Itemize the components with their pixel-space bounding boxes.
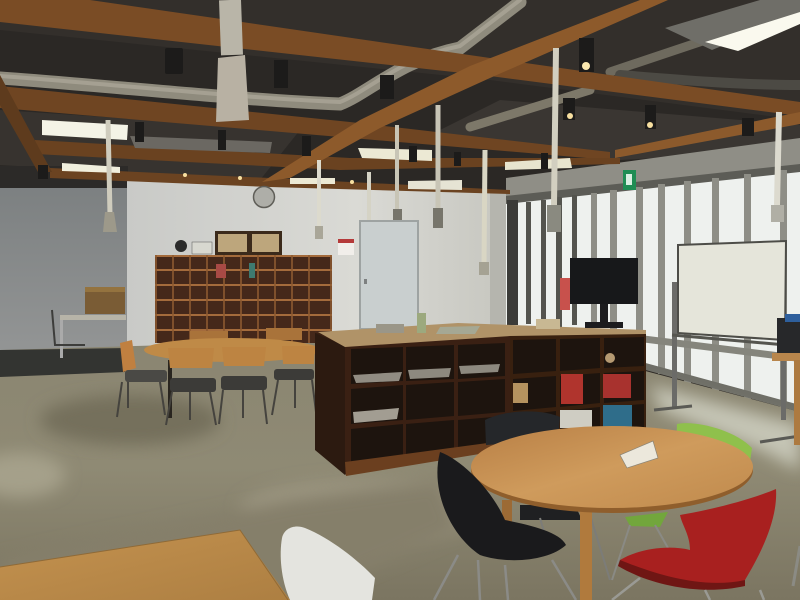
black chair behind table	[485, 411, 610, 580]
white chair foreground	[281, 526, 375, 600]
hanging exhaust hoses	[103, 0, 784, 275]
ceiling light panels	[42, 0, 800, 190]
left side desk and boxes	[52, 287, 126, 358]
green chair	[612, 423, 752, 580]
whiteboard on stand	[654, 241, 800, 442]
meeting table with chairs	[117, 328, 320, 425]
central bookshelf island	[315, 313, 646, 476]
foreground wooden table	[0, 530, 290, 600]
black chair foreground	[434, 452, 576, 600]
red chair	[612, 489, 776, 600]
window wall	[506, 138, 800, 412]
round table	[471, 426, 753, 600]
wooden ceiling beams	[0, 0, 800, 194]
ceiling ducts	[0, 0, 800, 127]
back pigeonhole shelf	[155, 255, 332, 343]
exit sign	[623, 170, 636, 190]
spotlights	[38, 38, 754, 184]
floor	[0, 335, 800, 600]
door	[338, 221, 418, 329]
table tent card	[620, 441, 658, 468]
right edge desk and screen	[772, 314, 800, 445]
right edge chair leg	[793, 546, 800, 586]
back wall	[127, 180, 510, 350]
left wall	[0, 166, 128, 353]
computer monitor	[570, 258, 638, 328]
framed certificates	[175, 231, 282, 255]
wall clock	[254, 186, 274, 208]
ceiling	[0, 0, 800, 200]
